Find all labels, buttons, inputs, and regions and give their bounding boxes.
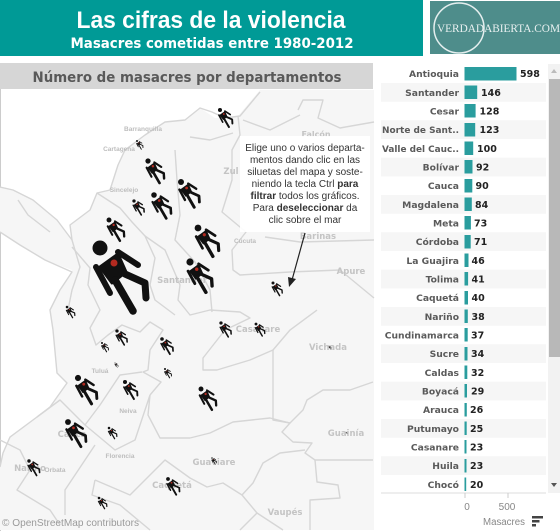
department labels: Casanare [411, 442, 459, 454]
icon: sort [532, 516, 543, 526]
bar values [470, 69, 540, 491]
bar values: 92 [476, 162, 489, 174]
department labels: La Guajira [406, 256, 459, 267]
arrow: callout to map [288, 233, 305, 287]
map panel [0, 89, 374, 531]
department labels: Cundinamarca [385, 330, 459, 342]
department labels: Huila [432, 461, 459, 472]
bar values: 123 [480, 125, 499, 136]
callout: instructions: Elige uno o varios departa- [245, 143, 365, 154]
chart axis: 0 [464, 502, 470, 513]
map place labels: Guaviare [193, 458, 236, 468]
department labels: Magdalena [402, 200, 459, 211]
callout: instructions: siluetas del mapa y soste- [247, 167, 363, 178]
department labels: Caldas [425, 368, 460, 379]
logo: Verdad Abierta: VERDADABIERTA.COM [437, 23, 560, 35]
department labels: Arauca [423, 405, 459, 416]
map place labels: Falcón [301, 129, 331, 139]
department labels [382, 69, 460, 491]
map place labels: Santander [157, 276, 208, 286]
department labels: Nariño [425, 312, 459, 323]
map place labels: Apure [337, 267, 366, 277]
bar values: 29 [471, 386, 484, 398]
bar values: 146 [481, 88, 501, 99]
map place labels: Cauca [58, 430, 87, 440]
bar values: 26 [470, 405, 484, 416]
logo: Verdad Abierta [430, 1, 560, 54]
map place labels: Tuluá [92, 368, 109, 375]
map place labels: Orbata [45, 467, 66, 474]
header banner [0, 0, 423, 56]
scrollbar [548, 64, 560, 493]
map panel heading [0, 63, 373, 89]
bar values: 73 [474, 218, 487, 230]
chart axis: 500 [499, 502, 516, 513]
department labels: Cauca [428, 181, 459, 192]
map place labels: Barranquilla [124, 126, 162, 133]
bar values: 23 [470, 461, 483, 472]
bar values: 40 [472, 293, 485, 304]
department labels: Tolima [426, 274, 459, 286]
map place labels: Guainía [328, 429, 364, 439]
bar values: 90 [476, 181, 489, 192]
callout: instructions: mentos dando clic en las [250, 155, 360, 166]
subtitle: Masacres cometidas entre 1980-2012 [70, 36, 354, 52]
department labels: Antioquia [409, 69, 459, 80]
department labels: Córdoba [416, 237, 459, 248]
map place labels: Vichada [309, 343, 347, 353]
callout: instructions: filtrar todos los gráficos. [251, 191, 359, 202]
callout: instructions: niendo la tecla Ctrl para [252, 179, 359, 190]
department labels: Chocó [428, 480, 459, 491]
map panel heading: Número de masacres por departamentos [32, 70, 342, 86]
bar values: 38 [472, 312, 485, 323]
chart axis: Masacres [483, 517, 525, 528]
department labels: Boyacá [422, 386, 459, 398]
callout: instructions: clic sobre el mar [269, 215, 342, 226]
bar values: 23 [470, 442, 483, 454]
map place labels: Vaupés [268, 507, 302, 518]
bar values: 32 [471, 368, 484, 379]
chart axis [381, 493, 546, 528]
department labels: Norte de Sant.. [382, 125, 459, 136]
bars [464, 67, 516, 491]
bar values: 46 [472, 256, 485, 267]
map place labels: Cartagena [103, 146, 135, 153]
bar values: 100 [477, 144, 497, 155]
title: Las cifras de la violencia [76, 7, 346, 34]
bar values: 20 [470, 480, 484, 491]
bar values: 71 [474, 237, 487, 248]
map attribution: © OpenStreetMap contributors [2, 517, 139, 529]
map place labels: Casanare [236, 325, 280, 335]
department borders [0, 92, 374, 530]
bar values: 37 [471, 330, 484, 342]
department labels: Meta [433, 218, 459, 230]
department labels: Valle del Cauc.. [382, 144, 459, 155]
map place labels: Nariño [14, 464, 46, 474]
department labels: Putumayo [407, 424, 459, 435]
bar values: 25 [470, 424, 483, 435]
land [0, 90, 374, 530]
bar chart panel: massacres by department [381, 64, 546, 493]
department labels: Cesar [430, 106, 459, 118]
bar values: 84 [475, 200, 489, 211]
callout: instructions [240, 136, 370, 232]
map place labels: Florencia [106, 453, 135, 460]
department labels: Bolívar [423, 162, 459, 174]
callout: instructions: Para deseleccionar da [253, 203, 358, 214]
map place labels: Barinas [300, 232, 336, 242]
map place labels: Caquetá [152, 481, 192, 491]
map place labels [14, 126, 366, 518]
map place labels: Cúcuta [234, 238, 256, 245]
bar values: 128 [480, 106, 500, 118]
map place labels: Neiva [119, 408, 137, 415]
map place labels: Sincelejo [110, 187, 138, 194]
bar values: 41 [472, 274, 485, 286]
massacre figures by department [27, 108, 347, 509]
department labels: Sucre [430, 349, 459, 360]
bar values: 598 [520, 69, 540, 80]
bar values: 34 [471, 349, 485, 360]
map place labels: Zul [223, 167, 239, 177]
department labels: Santander [405, 88, 459, 99]
department labels: Caquetá [416, 293, 459, 304]
